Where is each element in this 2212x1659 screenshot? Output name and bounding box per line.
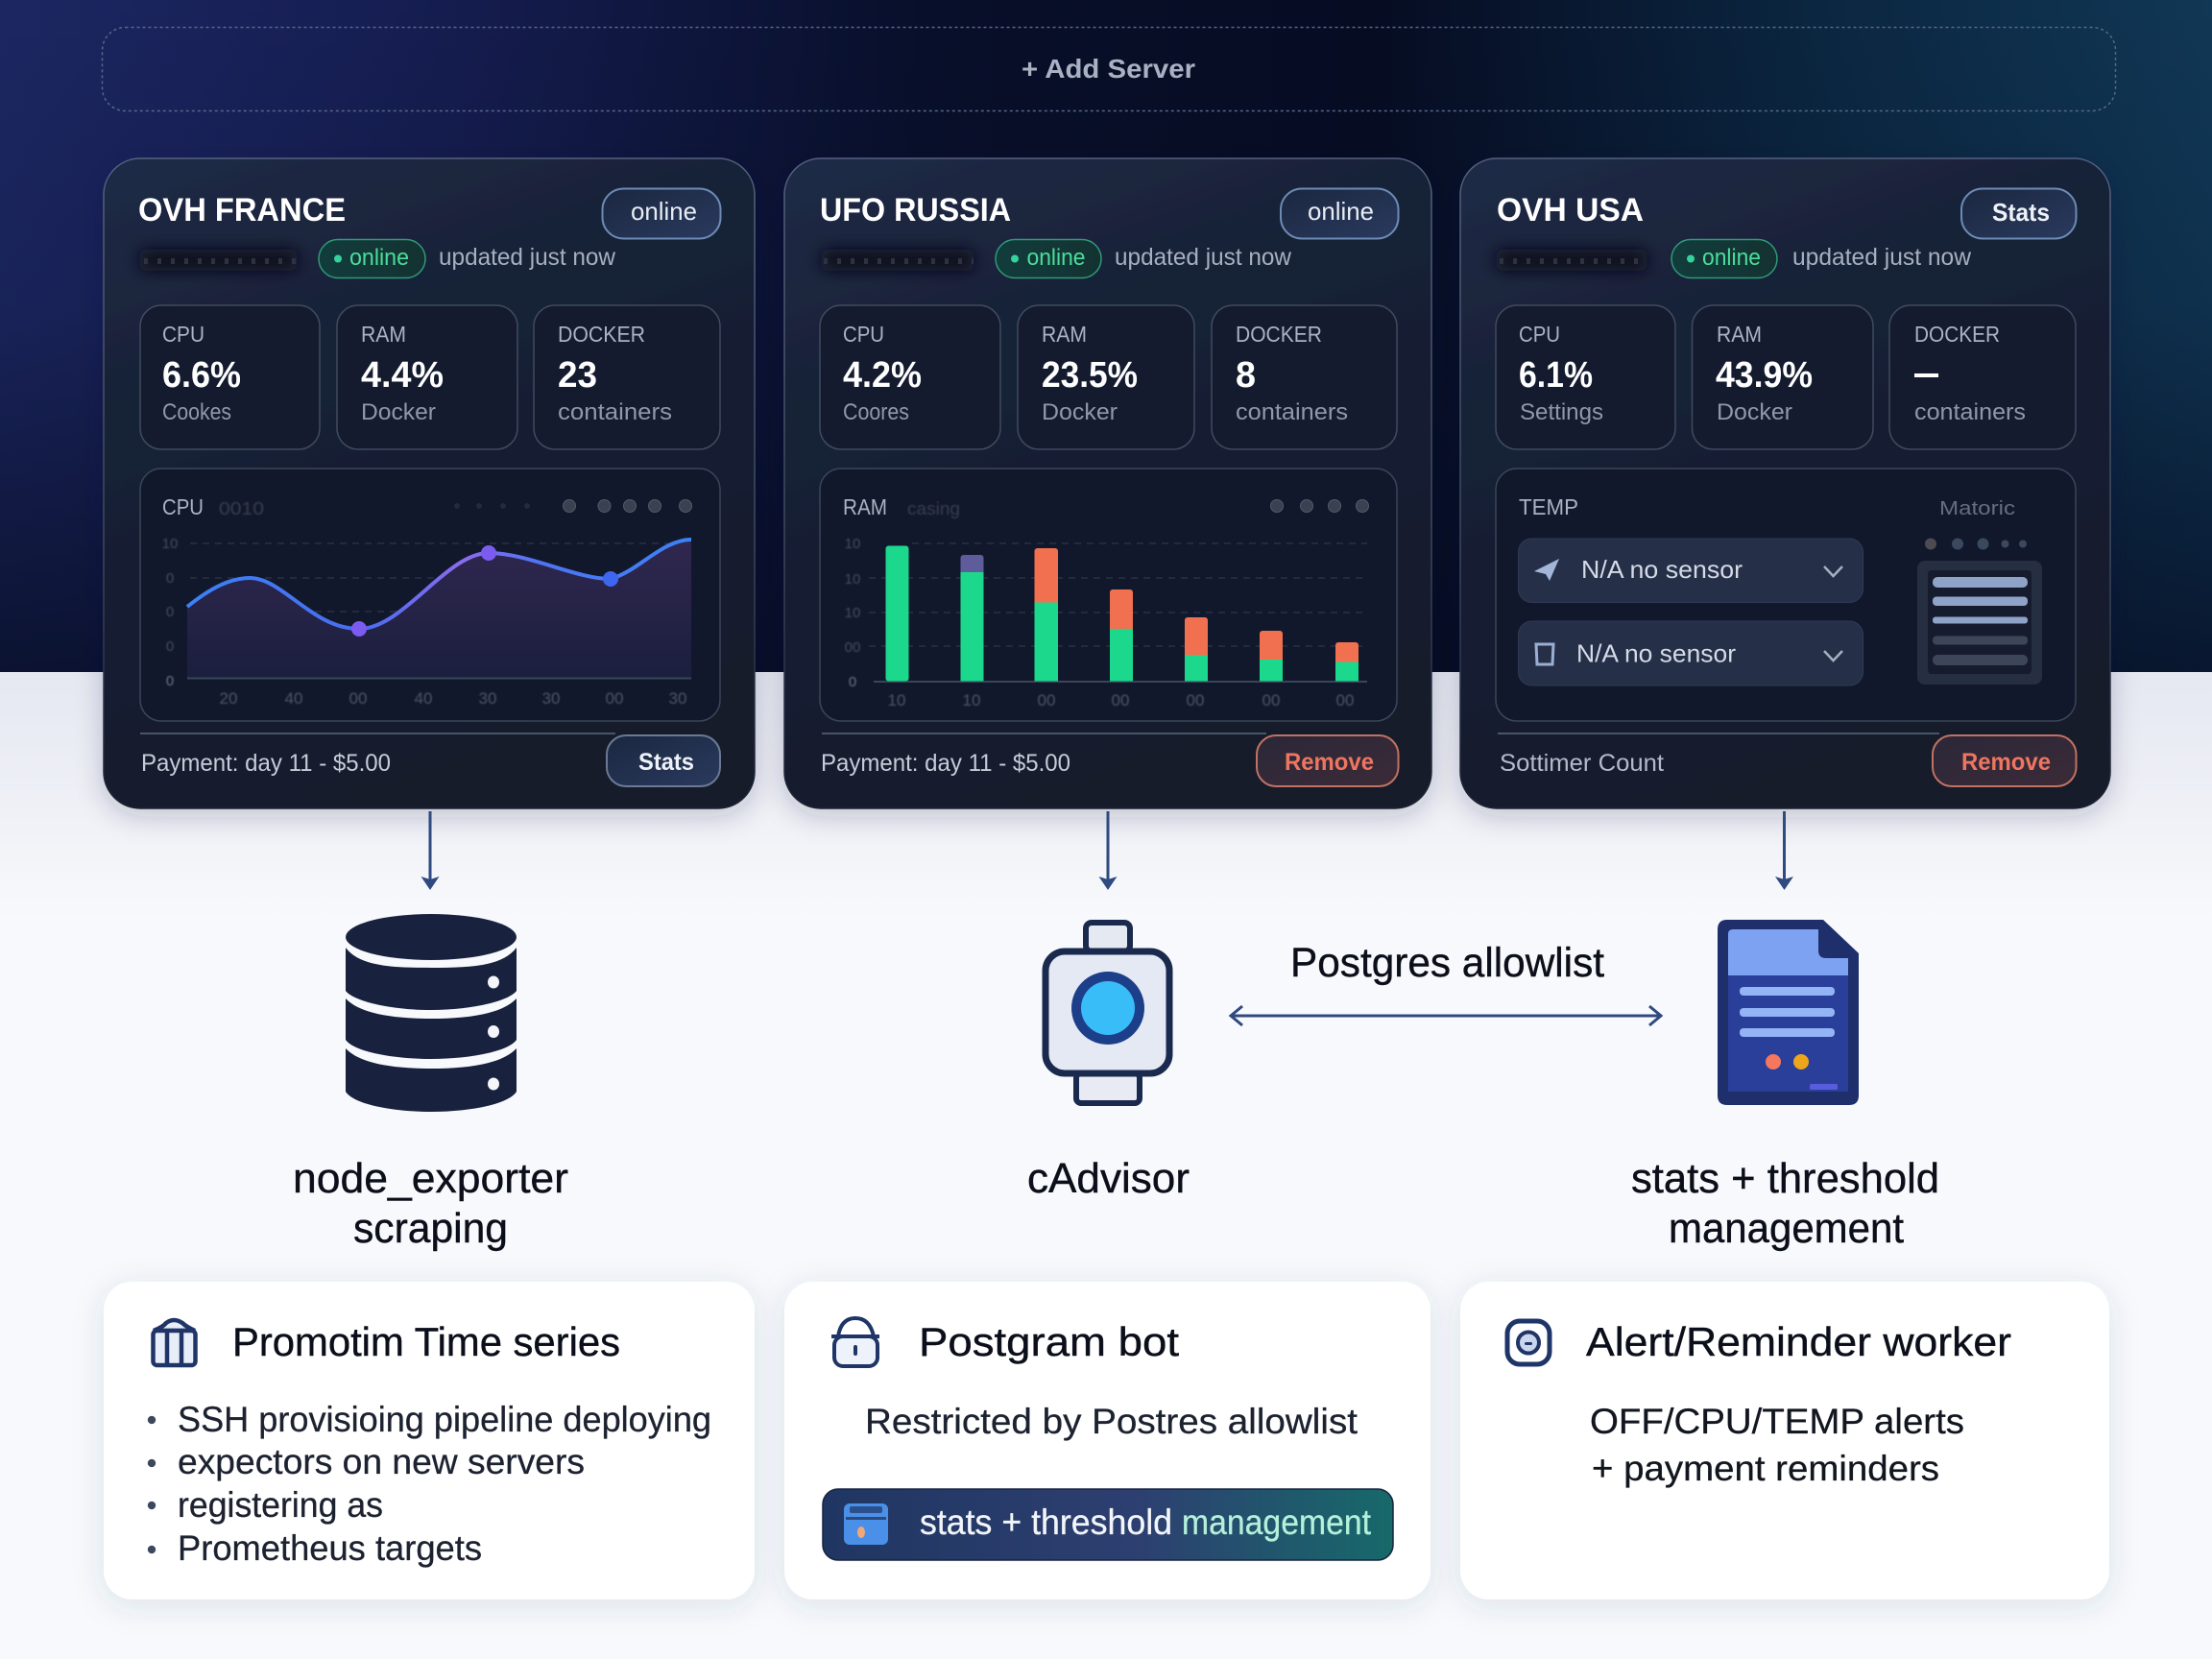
- chart: CPU line chart: CPU: [162, 494, 204, 519]
- redacted address: [821, 250, 974, 271]
- stat: CPU: 4.2%: [843, 355, 922, 396]
- heading: OVH FRANCE: OVH FRANCE: [138, 192, 346, 228]
- chart: CPU line chart: 30: [542, 689, 560, 708]
- description: + payment reminders: [1592, 1449, 1939, 1488]
- icon: cAdvisor watch: [1046, 923, 1169, 1103]
- stat: CPU: Coores: [843, 399, 909, 425]
- label: scraping: scraping: [353, 1205, 508, 1252]
- callout: stats + threshold management: management: [1182, 1503, 1372, 1542]
- chart: CPU line chart: 10: [162, 536, 178, 552]
- panel: OVH France server card: [104, 158, 755, 808]
- arrow: France card to node_exporter: [421, 811, 440, 890]
- updated text: updated just now: [1115, 244, 1292, 271]
- button: Stats: Stats: [638, 749, 694, 776]
- stat: Docker: 8: [1236, 355, 1256, 396]
- chart: CPU line chart: 0: [166, 673, 174, 689]
- chart: RAM bar chart: 00: [1262, 691, 1280, 709]
- bullet list: registering as: [178, 1485, 383, 1525]
- panel: temperature sensors: TEMP: [1519, 494, 1578, 519]
- stat: RAM: 4.4%: [361, 355, 444, 396]
- stat: CPU: 6.6%: [162, 355, 241, 396]
- select: second sensor: N/A no sensor: [1576, 639, 1736, 668]
- stat: CPU: Cookes: [162, 399, 231, 425]
- background: light lower area: [0, 672, 2212, 1659]
- chart: CPU line chart: 00: [606, 689, 623, 708]
- stat: CPU: [820, 305, 1000, 449]
- button: Stats: Stats: [1992, 198, 2050, 227]
- heading: Postgram bot: Postgram bot: [919, 1319, 1179, 1364]
- redacted address: [1496, 250, 1647, 271]
- chart: RAM bar chart: 10: [845, 605, 860, 621]
- background: dark header band: [0, 0, 2212, 672]
- button: Remove: [1257, 735, 1398, 786]
- stat: Docker: [1889, 305, 2076, 449]
- panel: temperature sensors: Matoric: [1939, 498, 2015, 519]
- chart: RAM bar chart: 00: [1187, 691, 1204, 709]
- stat: Docker: DOCKER: [1236, 322, 1322, 347]
- stat: RAM: RAM: [1717, 322, 1762, 347]
- status pill: online: [319, 240, 425, 278]
- chart: RAM bar chart: 10: [845, 571, 860, 588]
- settings count text: Sottimer Count: [1500, 750, 1664, 777]
- stat: CPU: CPU: [1519, 322, 1560, 347]
- label: cAdvisor: cAdvisor: [1027, 1155, 1190, 1202]
- icon: alert ring: [1507, 1321, 1550, 1364]
- stat: CPU: Settings: [1520, 399, 1603, 425]
- payment text: Payment: day 11 - $5.00: [821, 750, 1070, 777]
- heading: Alert/Reminder worker: Alert/Reminder worker: [1586, 1319, 2011, 1364]
- chart: CPU line chart: 30: [479, 689, 496, 708]
- stat: Docker: [534, 305, 720, 449]
- stat: RAM: Docker: [361, 399, 436, 425]
- stat: Docker: containers: [1236, 399, 1348, 425]
- button: online: online: [1308, 197, 1374, 226]
- heading: OVH USA: OVH USA: [1497, 192, 1644, 228]
- chart: CPU line chart: 0: [166, 638, 174, 655]
- stat: CPU: [140, 305, 320, 449]
- chart: RAM bar chart: 00: [1112, 691, 1129, 709]
- stat: RAM: RAM: [361, 322, 406, 347]
- icon: stats document: [1718, 920, 1859, 1105]
- heading: Promotim Time series: Promotim Time series: [232, 1319, 620, 1364]
- stat: Docker: DOCKER: [1914, 322, 2000, 347]
- stat: Docker: containers: [1914, 399, 2026, 425]
- stat: CPU: 6.1%: [1519, 355, 1593, 396]
- stat: Docker: [1212, 305, 1397, 449]
- heading: UFO RUSSIA: UFO RUSSIA: [820, 192, 1011, 228]
- status dots: [1925, 538, 2027, 549]
- description: OFF/CPU/TEMP alerts: [1590, 1402, 1964, 1441]
- chart: RAM bar chart: 00: [1336, 691, 1354, 709]
- chart: CPU line chart: 0: [166, 604, 174, 620]
- description: [1590, 1402, 1964, 1488]
- chart: CPU line chart: 0010: [219, 499, 264, 518]
- panel: Alert/Reminder worker: [1460, 1282, 2109, 1599]
- stat: Docker: DOCKER: [558, 322, 645, 347]
- bullet list: Prometheus targets: [178, 1528, 482, 1568]
- bullet list: expectors on new servers: [178, 1442, 585, 1481]
- stat: RAM: [337, 305, 517, 449]
- status pill: online: online: [1702, 245, 1761, 271]
- button: online: [1281, 188, 1398, 238]
- label: node_exporter: node_exporter: [293, 1155, 568, 1202]
- chart: RAM bar chart: 00: [1038, 691, 1055, 709]
- select: first sensor: [1519, 539, 1863, 603]
- button: Remove: Remove: [1285, 749, 1374, 776]
- select: first sensor: N/A no sensor: [1581, 555, 1743, 584]
- chart: RAM bar chart: 10: [888, 691, 905, 709]
- updated text: updated just now: [1792, 244, 1972, 271]
- payment text: Payment: day 11 - $5.00: [141, 750, 391, 777]
- icon: metric document: [1917, 561, 2042, 685]
- button: Remove: Remove: [1961, 749, 2051, 776]
- chart: CPU line chart: 0: [166, 570, 174, 587]
- chart: CPU line chart: 00: [349, 689, 367, 708]
- button: online: online: [631, 197, 697, 226]
- panel: OVH USA server card: [1460, 158, 2110, 808]
- select: second sensor: [1519, 621, 1863, 685]
- icon: lock: [831, 1318, 879, 1366]
- stat: RAM: RAM: [1042, 322, 1087, 347]
- chart: RAM bar chart: 10: [963, 691, 980, 709]
- arrow: USA card to stats: [1775, 811, 1793, 890]
- bullet list: SSH provisioing pipeline deploying: [178, 1400, 711, 1439]
- stat: Docker: 23: [558, 355, 597, 396]
- add server dashed button: + Add Server: [1022, 54, 1195, 84]
- redacted address: [139, 250, 298, 271]
- chart: RAM bar chart: 00: [845, 639, 860, 656]
- panel: Postgram bot: [784, 1282, 1431, 1599]
- label: stats + threshold: stats + threshold: [1631, 1155, 1939, 1202]
- stat: RAM: [1692, 305, 1873, 449]
- panel: Prometheus time series: [104, 1282, 755, 1599]
- stat: RAM: 23.5%: [1042, 355, 1138, 396]
- status pill: online: [996, 240, 1101, 278]
- icon: columns: [154, 1320, 196, 1365]
- status pill: online: [1671, 240, 1777, 278]
- arrow: two-way Postgres allowlist: [1231, 1006, 1661, 1025]
- bullet list: [148, 1400, 711, 1568]
- label: Postgres allowlist: Postgres allowlist: [1290, 940, 1604, 986]
- chart: RAM bar chart: casing: [907, 499, 960, 518]
- chart: RAM bar chart: 0: [849, 674, 856, 690]
- label: management: management: [1669, 1205, 1904, 1252]
- chart: CPU line chart: 40: [415, 689, 432, 708]
- chart: CPU line chart: 20: [220, 689, 237, 708]
- stat: Docker: containers: [558, 399, 672, 425]
- chart: RAM bar chart: RAM: [843, 494, 887, 519]
- button: online: [603, 188, 720, 238]
- chart: RAM bar chart: 10: [845, 536, 860, 552]
- description: Restricted by Postres allowlist: [865, 1402, 1358, 1441]
- button: Stats: [607, 735, 720, 786]
- stat: CPU: CPU: [162, 322, 204, 347]
- stat: RAM: Docker: [1042, 399, 1118, 425]
- chart: CPU line chart: 30: [669, 689, 686, 708]
- arrow: Russia card to cAdvisor: [1098, 811, 1118, 890]
- icon: database: [346, 914, 517, 1112]
- callout: stats + threshold management: stats + threshold: [920, 1503, 1172, 1542]
- updated text: updated just now: [439, 244, 616, 271]
- status pill: online: online: [1027, 245, 1085, 271]
- chart: CPU line chart: [140, 469, 720, 721]
- button: Remove: [1933, 735, 2076, 786]
- status pill: online: online: [349, 245, 409, 271]
- callout: stats + threshold management: [823, 1489, 1393, 1560]
- stat: CPU: [1496, 305, 1675, 449]
- button: Stats: [1961, 188, 2076, 238]
- chart: RAM bar chart: [820, 469, 1397, 721]
- panel: temperature sensors: [1496, 469, 2076, 721]
- stat: CPU: CPU: [843, 322, 884, 347]
- stat: RAM: [1018, 305, 1194, 449]
- chart: CPU line chart: 40: [285, 689, 302, 708]
- add server dashed button: [102, 27, 2116, 111]
- stat: RAM: 43.9%: [1716, 355, 1813, 396]
- stat: RAM: Docker: [1717, 399, 1792, 425]
- panel: UFO Russia server card: [784, 158, 1431, 808]
